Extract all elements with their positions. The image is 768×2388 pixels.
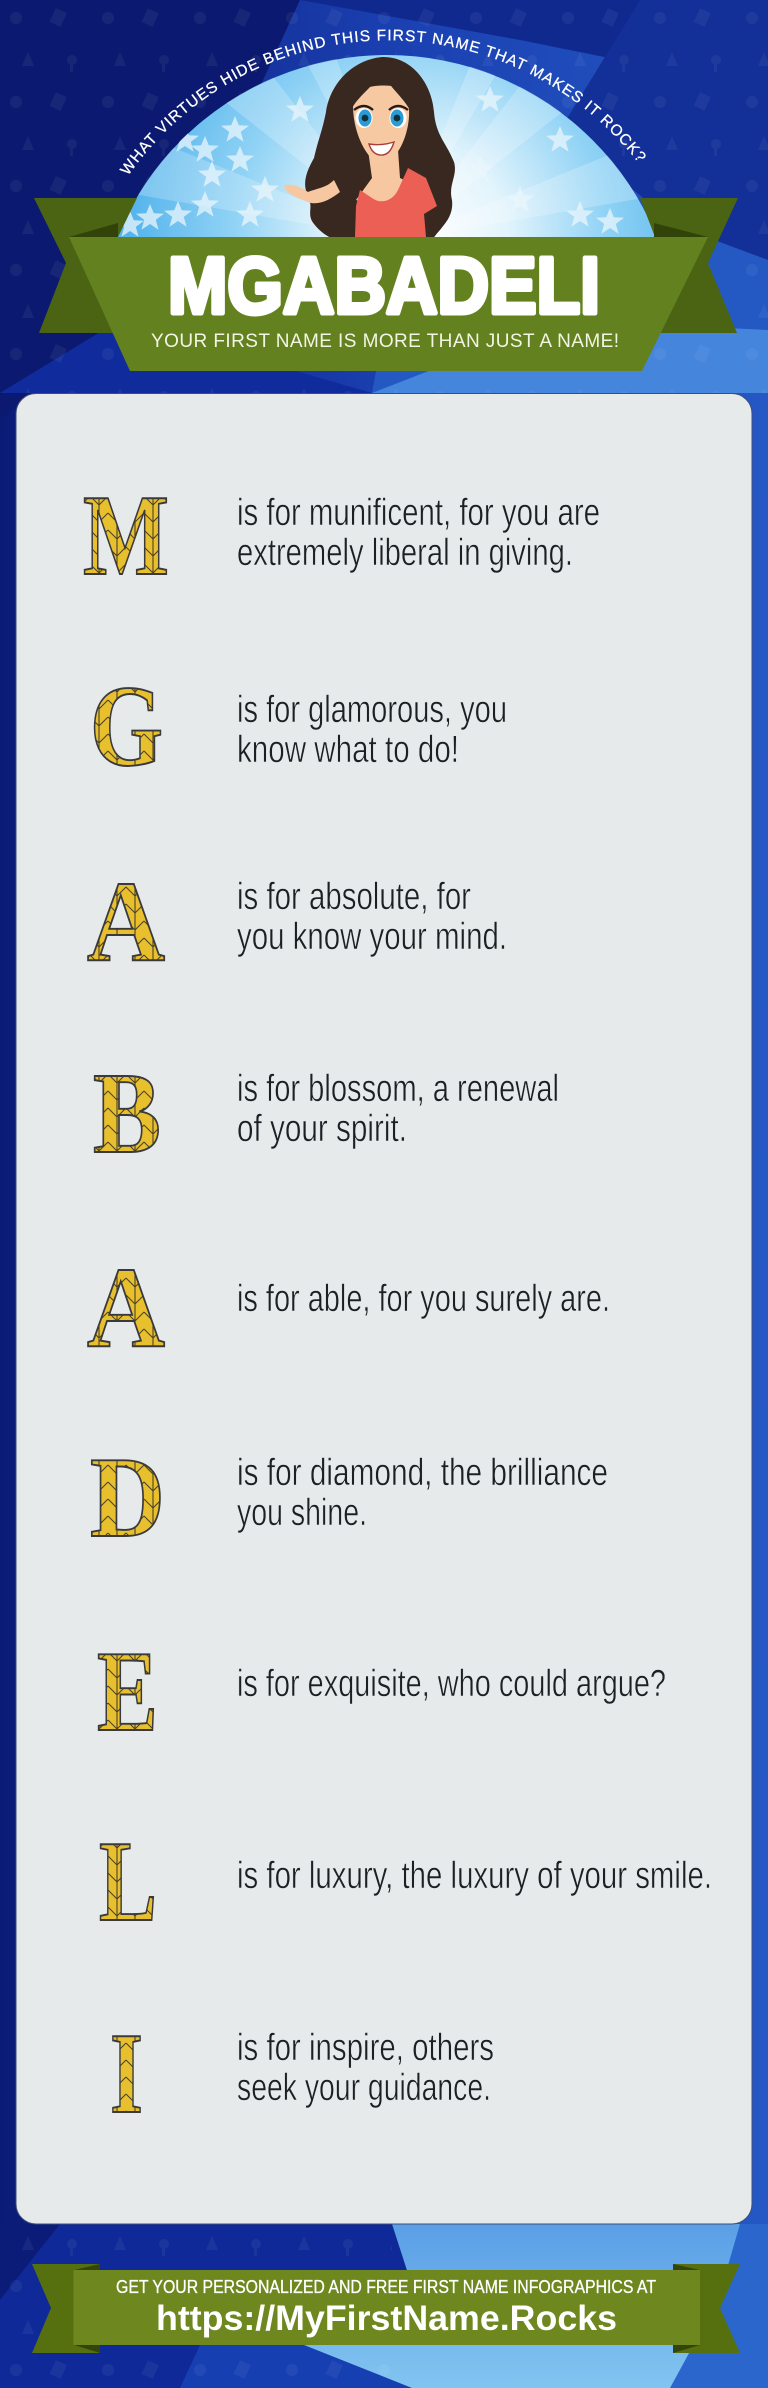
row D: D	[90, 1434, 165, 1562]
row A	[87, 858, 507, 986]
row M: is for munificent, for you are	[237, 492, 600, 534]
row M: extremely liberal in giving.	[237, 532, 573, 574]
panel: virtues list	[16, 394, 752, 2224]
row G: know what to do!	[237, 729, 459, 771]
row A: A	[87, 858, 165, 986]
eyes	[354, 106, 408, 128]
ribbon: footer	[32, 2264, 740, 2353]
row A: you know your mind.	[237, 916, 507, 958]
row M: M	[83, 472, 169, 600]
name title: MGABADELI	[168, 241, 600, 330]
row A: is for absolute, for	[237, 876, 471, 918]
shirt	[355, 168, 437, 237]
row L	[99, 1818, 712, 1946]
url: https://MyFirstName.Rocks	[156, 2299, 617, 2338]
row D: is for diamond, the brilliance	[237, 1452, 608, 1494]
smile	[369, 142, 394, 155]
row G: G	[90, 663, 163, 791]
row I	[110, 2010, 494, 2138]
arm and hand	[284, 180, 340, 203]
row E	[97, 1628, 666, 1756]
row D: you shine.	[237, 1492, 367, 1534]
row I: seek your guidance.	[237, 2067, 491, 2109]
row B: of your spirit.	[237, 1108, 407, 1150]
row B	[93, 1050, 559, 1178]
row A: A	[87, 1244, 165, 1372]
row I: I	[110, 2010, 143, 2138]
row B: B	[93, 1050, 161, 1178]
row E: E	[97, 1628, 158, 1756]
character illustration	[284, 57, 455, 240]
row G	[90, 663, 507, 791]
row I: is for inspire, others	[237, 2027, 494, 2069]
curved tagline: WHAT VIRTUES HIDE BEHIND THIS FIRST NAME THAT MAKES IT ROCK?	[119, 30, 646, 174]
row A: is for able, for you surely are.	[237, 1278, 610, 1320]
hair fringe	[353, 86, 409, 108]
subtitle: YOUR FIRST NAME IS MORE THAN JUST A NAME!	[151, 331, 619, 352]
call to action: GET YOUR PERSONALIZED AND FREE FIRST NAME INFOGRAPHICS AT	[116, 2277, 656, 2297]
row A	[87, 1244, 610, 1372]
row L: L	[99, 1818, 157, 1946]
row B: is for blossom, a renewal	[237, 1068, 559, 1110]
hair	[305, 57, 455, 240]
ribbon: header	[34, 198, 738, 371]
row D	[90, 1434, 608, 1562]
row M	[83, 472, 600, 600]
header dome with starburst	[118, 55, 654, 237]
neck and chest	[356, 151, 403, 202]
row G: is for glamorous, you	[237, 689, 507, 731]
face	[353, 86, 410, 156]
